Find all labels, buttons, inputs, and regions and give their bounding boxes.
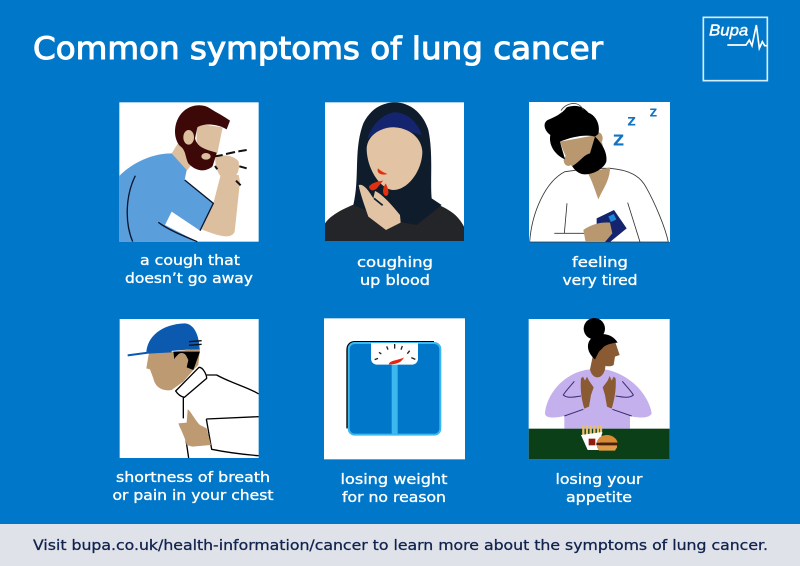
- icon: bathroom scales: [347, 342, 440, 435]
- illustration: coughing man: [119, 105, 247, 242]
- caption: weight line 2: for no reason: [342, 490, 446, 506]
- caption: blood: coughing: [357, 255, 433, 271]
- footer text: Visit bupa.co.uk/health-information/cancer to learn more about the symptoms of lung cancer.: [33, 538, 768, 554]
- caption: tired: feeling: [572, 255, 628, 271]
- panel: breath: [120, 319, 259, 458]
- illustration: woman in hijab: [325, 102, 464, 241]
- panel: coughing blood: [325, 102, 464, 241]
- caption: blood line 2: up blood: [360, 273, 430, 289]
- caption: tired line 2: very tired: [562, 273, 638, 289]
- illustration: woman refusing food: [529, 318, 670, 459]
- panel: tired: [529, 102, 670, 242]
- panel: appetite: [529, 318, 670, 459]
- illustration: sleepy man: Z: [650, 108, 658, 120]
- footer band: [0, 524, 800, 566]
- panel: cough: [119, 102, 259, 242]
- logo: Bupa: [703, 17, 767, 81]
- caption: breath: shortness of breath: [116, 470, 270, 486]
- caption: appetite line 2: appetite: [566, 490, 632, 506]
- caption: weight: losing weight: [340, 472, 448, 488]
- illustration: sleepy man: Z: [613, 131, 624, 149]
- illustration: sleepy man: Z: [627, 114, 636, 128]
- logo: Bupa: Bupa: [709, 23, 748, 40]
- illustration: sleepy man: [530, 103, 668, 242]
- illustration: breathless man: [128, 323, 259, 458]
- panel: weight: [324, 318, 465, 459]
- caption: cough: a cough that: [140, 253, 240, 269]
- caption: appetite: losing your: [556, 472, 643, 488]
- caption: cough line 2: doesn’t go away: [125, 271, 253, 287]
- caption: breath line 2: or pain in your chest: [112, 488, 274, 504]
- title: Common symptoms of lung cancer: [33, 31, 603, 67]
